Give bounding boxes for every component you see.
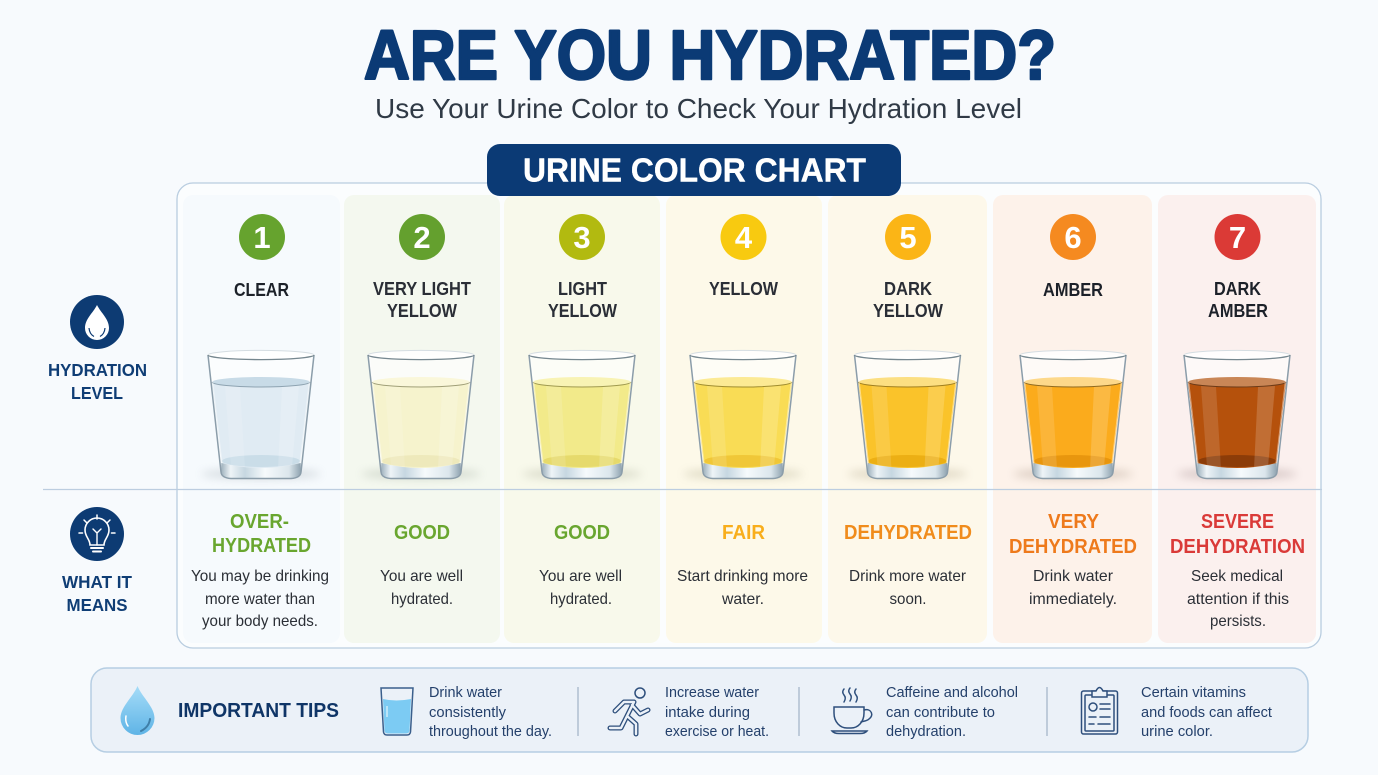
panel: urine color chart [177,183,1321,648]
colour name: DARK [1214,279,1261,299]
colour name: YELLOW [548,301,617,321]
colour name [1208,279,1268,321]
number badge 4: 4 [735,220,753,255]
status: DEHYDRATED [844,522,972,544]
status: FAIR [722,522,766,544]
description [380,568,463,608]
column 5: dark yellow [828,195,987,643]
description: hydrated. [391,591,453,608]
glass: clear [201,350,321,479]
description: attention if this [1187,591,1289,608]
number badge 5 [885,214,931,260]
status: GOOD [394,522,450,544]
glass: dark yellow [848,350,968,479]
status [1170,511,1305,558]
description: You are well [539,568,622,585]
tip 1 text [429,685,552,740]
column 7: dark amber [1158,195,1316,643]
description: You may be drinking [191,568,329,585]
status: GOOD [554,522,610,544]
tip 1 icon: glass of water [381,688,413,735]
number badge 7: 7 [1229,220,1246,255]
icon: blue drop [120,686,154,735]
colour name: LIGHT [558,279,607,299]
colour name: YELLOW [387,301,457,321]
number badge 5: 5 [899,220,917,255]
number badge 4 [720,214,766,260]
tips background [91,668,1308,752]
label text: MEANS [66,595,128,615]
column background [1158,195,1316,643]
description [191,568,329,630]
tip 1 text: consistently [429,705,507,721]
number badge 1 [239,214,285,260]
colour name [373,279,471,321]
colour name: VERY LIGHT [373,279,471,299]
subtitle: Use Your Urine Color to Check Your Hydration Level [375,93,1022,124]
tip 4 text: Certain vitamins [1141,685,1246,701]
glass: yellow [683,350,803,479]
colour name [873,279,943,321]
column background [828,195,987,643]
status: OVER- [230,511,289,533]
description: persists. [1210,613,1266,630]
tip 2 text: exercise or heat. [665,724,769,740]
label text [48,360,147,403]
description: soon. [890,591,926,608]
description: Drink water [1033,568,1114,585]
label text [62,572,132,615]
tip 3 text: dehydration. [886,724,966,740]
label text: LEVEL [71,383,123,403]
tip 4 icon: clipboard [1082,688,1118,734]
status: VERY [1048,511,1100,533]
label text: WHAT IT [62,572,132,592]
label text: HYDRATION [48,360,147,380]
description [539,568,622,608]
tip 4 text: urine color. [1141,724,1213,740]
colour name [548,279,617,321]
colour name: YELLOW [709,279,778,299]
colour name: AMBER [1043,280,1103,300]
description: Start drinking more [677,568,808,585]
tip 3 text: Caffeine and alcohol [886,685,1018,701]
tips heading: IMPORTANT TIPS [178,700,339,722]
colour name: AMBER [1208,301,1268,321]
panel outline [177,183,1321,648]
number badge 3: 3 [573,220,591,255]
status: DEHYDRATION [1170,536,1305,558]
tip 2 text: intake during [665,705,750,721]
icon: light bulb [70,507,124,561]
description: more water than [205,591,315,608]
status [1009,511,1137,558]
glass: very light yellow [361,350,481,479]
glass: light yellow [522,350,642,479]
number badge 7 [1214,214,1260,260]
description: immediately. [1029,591,1117,608]
tip 3 text: can contribute to [886,705,995,721]
column background [993,195,1152,643]
column background [344,195,500,643]
colour name: YELLOW [873,301,943,321]
description [677,568,808,608]
tip 2 icon: runner [610,688,648,734]
column 3: light yellow [504,195,660,643]
colour name: CLEAR [234,280,289,300]
number badge 2: 2 [413,220,431,255]
tip 4 text [1141,685,1272,740]
column 2: very light yellow [344,195,500,643]
tip 2 text [665,685,769,740]
glass: dark amber [1177,350,1297,479]
column 4: yellow [666,195,822,643]
row label: what it means [62,507,132,615]
icon: water drop [70,295,124,349]
description [849,568,967,608]
status: HYDRATED [212,535,311,557]
tip 3 text [886,685,1018,740]
description: your body needs. [202,613,318,630]
description: water. [721,591,764,608]
colour name: DARK [884,279,932,299]
number badge 1: 1 [253,220,271,255]
number badge 6: 6 [1064,220,1082,255]
status: DEHYDRATED [1009,536,1137,558]
description: hydrated. [550,591,612,608]
tip 4 text: and foods can affect [1141,705,1272,721]
chart title badge: URINE COLOR CHART [523,152,866,188]
description: Drink more water [849,568,967,585]
title: ARE YOU HYDRATED? [364,16,1056,94]
description [1187,568,1289,630]
column 1: clear [183,195,340,643]
number badge 6 [1050,214,1096,260]
glass: amber [1013,350,1133,479]
description: Seek medical [1191,568,1283,585]
column background [666,195,822,643]
description: You are well [380,568,463,585]
column background [183,195,340,643]
column 6: amber [993,195,1152,643]
tip 2 text: Increase water [665,685,759,701]
row label: hydration level [48,295,147,403]
tip 1 text: throughout the day. [429,724,552,740]
column background [504,195,660,643]
status [212,511,311,557]
panel: important tips [91,668,1308,752]
number badge 2 [399,214,445,260]
description [1029,568,1117,608]
tip 3 icon: coffee cup [832,688,872,734]
number badge 3 [559,214,605,260]
chart title badge [487,144,901,196]
status: SEVERE [1201,511,1274,533]
tip 1 text: Drink water [429,685,502,701]
